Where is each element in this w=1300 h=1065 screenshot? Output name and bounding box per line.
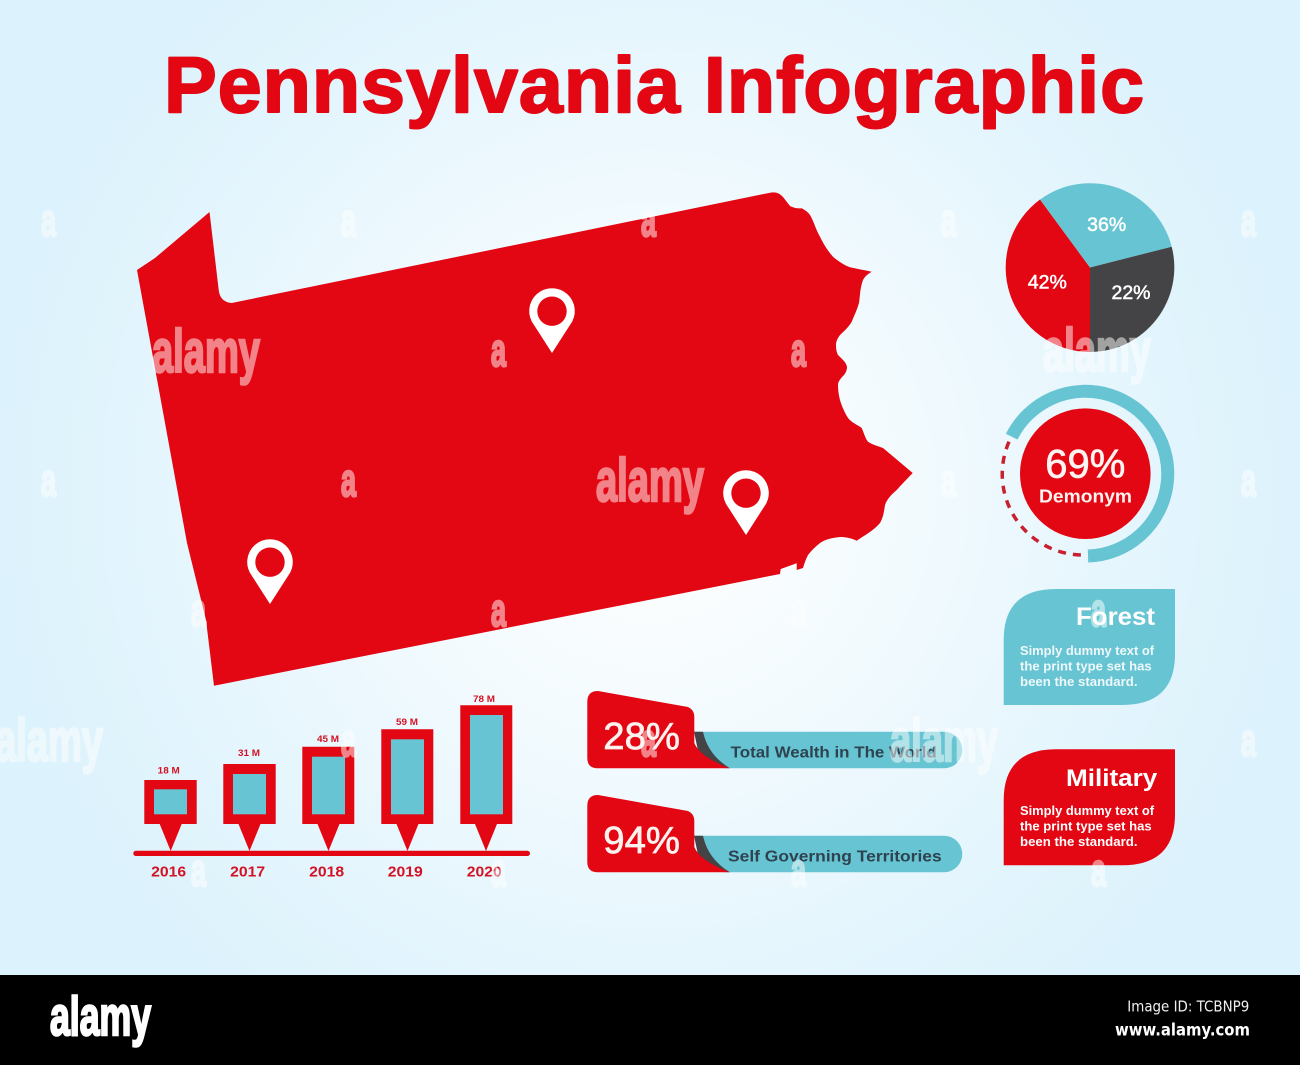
column 2018: 2018 xyxy=(309,864,344,881)
card heading: Military: Military xyxy=(1066,765,1158,792)
watermark overlay: a xyxy=(491,584,506,636)
watermark overlay: a xyxy=(191,584,206,636)
watermark overlay: a xyxy=(1241,714,1256,766)
watermark overlay: a xyxy=(641,194,656,246)
watermark overlay: a xyxy=(1241,194,1256,246)
watermark overlay: a xyxy=(341,714,356,766)
stat value: 94% xyxy=(603,820,680,862)
watermark overlay: alamy xyxy=(890,707,998,774)
column 2019: 59 M xyxy=(396,717,418,727)
watermark overlay: a xyxy=(341,454,356,506)
progress label: Demonym xyxy=(1039,487,1132,507)
footer image id: Image ID: TCBNP9 xyxy=(1127,998,1249,1016)
column 2019: 2019 xyxy=(388,864,423,881)
column 2018: 45 M xyxy=(317,734,339,744)
watermark overlay: a xyxy=(41,454,56,506)
watermark overlay: alamy xyxy=(596,447,704,514)
panel: forest card xyxy=(1004,589,1175,705)
watermark overlay: alamy xyxy=(152,318,260,385)
stat label: Total Wealth in The World xyxy=(731,744,937,761)
watermark overlay xyxy=(0,194,1256,896)
footer logo: alamy xyxy=(50,985,151,1047)
column 2016: 18 M xyxy=(158,765,180,775)
title: Pennsylvania Infographic xyxy=(164,40,1144,129)
pie label: 22%: 22% xyxy=(1111,282,1151,304)
footer url: www.alamy.com xyxy=(1115,1021,1250,1040)
map: Pennsylvania state silhouette xyxy=(137,192,913,686)
card body text xyxy=(1020,644,1155,689)
watermark overlay: a xyxy=(791,324,806,376)
watermark overlay: a xyxy=(941,454,956,506)
icon: map pin east xyxy=(723,470,769,535)
column 2020: 78 M xyxy=(473,694,495,704)
watermark overlay: a xyxy=(191,844,206,896)
watermark overlay: a xyxy=(41,194,56,246)
column 2020 xyxy=(460,694,512,881)
card body text: the print type set has xyxy=(1020,660,1152,674)
column 2016: 2016 xyxy=(151,864,186,881)
column 2019 xyxy=(381,717,433,881)
footer band xyxy=(0,975,1300,1065)
watermark overlay: a xyxy=(491,844,506,896)
column 2020: 2020 xyxy=(467,864,502,881)
watermark overlay: a xyxy=(341,194,356,246)
watermark overlay: a xyxy=(791,844,806,896)
panel: military card xyxy=(1004,749,1175,865)
watermark overlay: alamy xyxy=(1043,317,1151,384)
icon: map pin southwest xyxy=(247,539,293,604)
column 2017: 31 M xyxy=(238,748,260,758)
card body text xyxy=(1020,804,1155,849)
pie chart xyxy=(1006,183,1174,352)
watermark overlay: a xyxy=(1091,584,1106,636)
watermark overlay: a xyxy=(1091,844,1106,896)
watermark overlay: a xyxy=(941,194,956,246)
watermark overlay: a xyxy=(1241,454,1256,506)
watermark overlay: a xyxy=(491,324,506,376)
card body text: been the standard. xyxy=(1020,675,1138,689)
pie label: 42%: 42% xyxy=(1028,271,1067,293)
icon: map pin north xyxy=(529,288,575,353)
radial progress: 69% Demonym xyxy=(1002,391,1168,556)
column 2018 xyxy=(302,734,354,881)
stat value: 28% xyxy=(603,716,680,758)
stat bar: 28% Total Wealth in The World xyxy=(587,691,962,768)
stat bar: 94% Self Governing Territories xyxy=(587,795,962,872)
card body text: the print type set has xyxy=(1020,820,1152,834)
watermark overlay: a xyxy=(791,584,806,636)
watermark overlay: alamy xyxy=(0,707,103,774)
bar chart: pin-shaped yearly columns xyxy=(133,694,530,881)
column 2017: 2017 xyxy=(230,864,265,881)
column 2017 xyxy=(223,748,276,881)
watermark overlay: a xyxy=(641,714,656,766)
card heading: Forest: Forest xyxy=(1076,603,1156,631)
progress value: 69% xyxy=(1045,443,1125,487)
card body text: Simply dummy text of xyxy=(1020,804,1155,818)
card body text: Simply dummy text of xyxy=(1020,644,1155,658)
stat label: Self Governing Territories xyxy=(728,848,942,865)
card body text: been the standard. xyxy=(1020,835,1138,849)
chart baseline xyxy=(133,851,530,856)
column 2016 xyxy=(144,765,197,881)
pie label: 36%: 36% xyxy=(1087,214,1126,236)
